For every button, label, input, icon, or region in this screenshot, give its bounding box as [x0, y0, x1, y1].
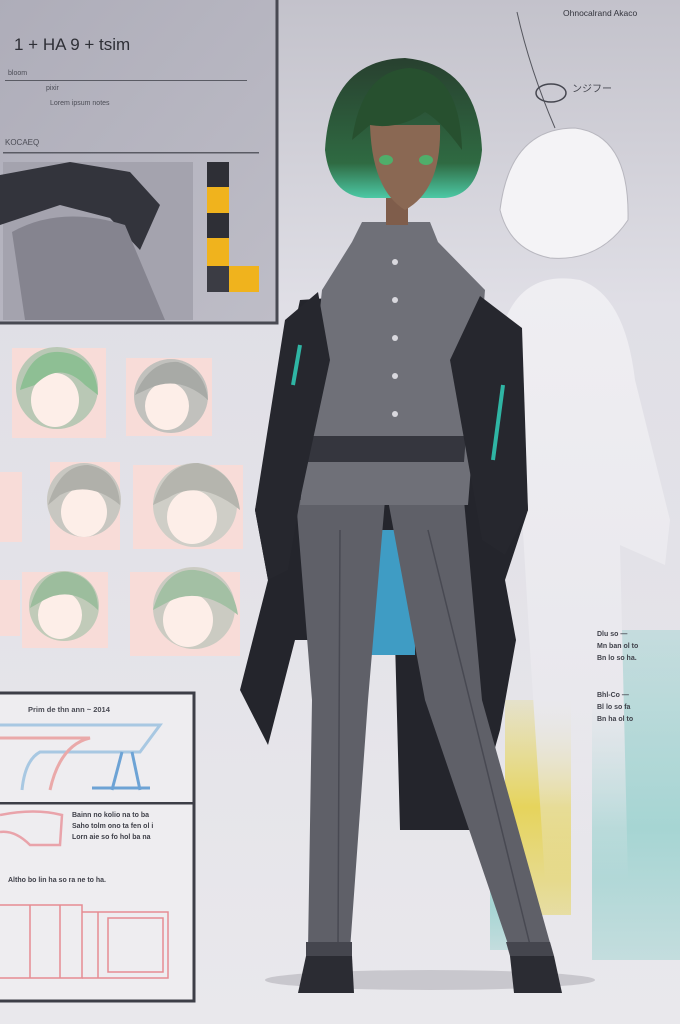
trouser seams — [338, 530, 530, 945]
expression sheet — [0, 347, 243, 656]
panel notes: pixir — [46, 85, 60, 92]
top-right label: Ohnocalrand Akaco — [563, 8, 637, 18]
blue line drawing — [0, 725, 160, 790]
right notes: Bhl-Co — — [597, 692, 629, 699]
face — [370, 125, 440, 210]
head sketch 3 — [0, 462, 121, 550]
right notes: Bn lo so ha. — [597, 655, 637, 662]
tunic buttons — [392, 259, 398, 417]
middle text: Altho bo lin ha so ra ne to ha. — [8, 877, 106, 884]
panel notes — [5, 70, 110, 147]
main figure, abstract and clothed — [240, 58, 595, 993]
placeholder fabric detail view — [0, 162, 193, 320]
middle text: Bainn no kolio na to ba — [72, 812, 149, 819]
top-left panel — [0, 0, 277, 323]
coat right side — [450, 296, 528, 555]
coat blue lining — [368, 530, 415, 655]
middle text: Lorn aie so fo hol ba na — [72, 834, 151, 841]
top drawing caption: Prim de thn ann ~ 2014 — [28, 705, 111, 714]
trousers — [296, 500, 552, 950]
head sketch 2 — [126, 358, 212, 436]
head sketch 1 — [12, 347, 106, 438]
hair back — [325, 58, 482, 198]
annotation icon — [536, 84, 566, 102]
annotation text: ンジフー — [572, 84, 612, 95]
trouser cuffs — [306, 942, 554, 956]
high-neck tunic — [300, 222, 485, 505]
panel notes: Lorem ipsum notes — [50, 100, 110, 107]
middle text: Saho tolm ono ta fen ol i — [72, 823, 153, 830]
boots — [298, 956, 562, 993]
right notes: Mn ban ol to — [597, 643, 638, 650]
paint stains — [490, 630, 680, 960]
panel notes: bloom — [8, 70, 27, 77]
head sketch 4 — [133, 463, 243, 549]
panel notes: KOCAEQ — [5, 138, 39, 147]
back-view sketch, clothed — [500, 12, 670, 880]
waist belt — [302, 436, 466, 462]
right notes — [597, 631, 638, 723]
middle text — [8, 812, 153, 884]
pink stroke — [0, 812, 62, 845]
ground shadow — [265, 970, 595, 990]
bottom-left panel — [0, 693, 194, 1001]
fringe — [352, 68, 462, 150]
colour swatches — [207, 162, 259, 292]
coat back panel — [240, 290, 528, 830]
teal accents — [293, 345, 503, 460]
pink frame drawing — [0, 905, 168, 978]
neck — [386, 195, 408, 225]
head sketch 5 — [0, 571, 108, 648]
panel heading: 1 + HA 9 + tsim — [14, 35, 130, 54]
right notes: Bn ha ol to — [597, 716, 633, 723]
coat left side — [255, 292, 330, 580]
eyes — [379, 155, 433, 165]
head sketch 6 — [130, 567, 240, 656]
right notes: Dlu so — — [597, 631, 627, 638]
right notes: Bl lo so fa — [597, 704, 631, 711]
